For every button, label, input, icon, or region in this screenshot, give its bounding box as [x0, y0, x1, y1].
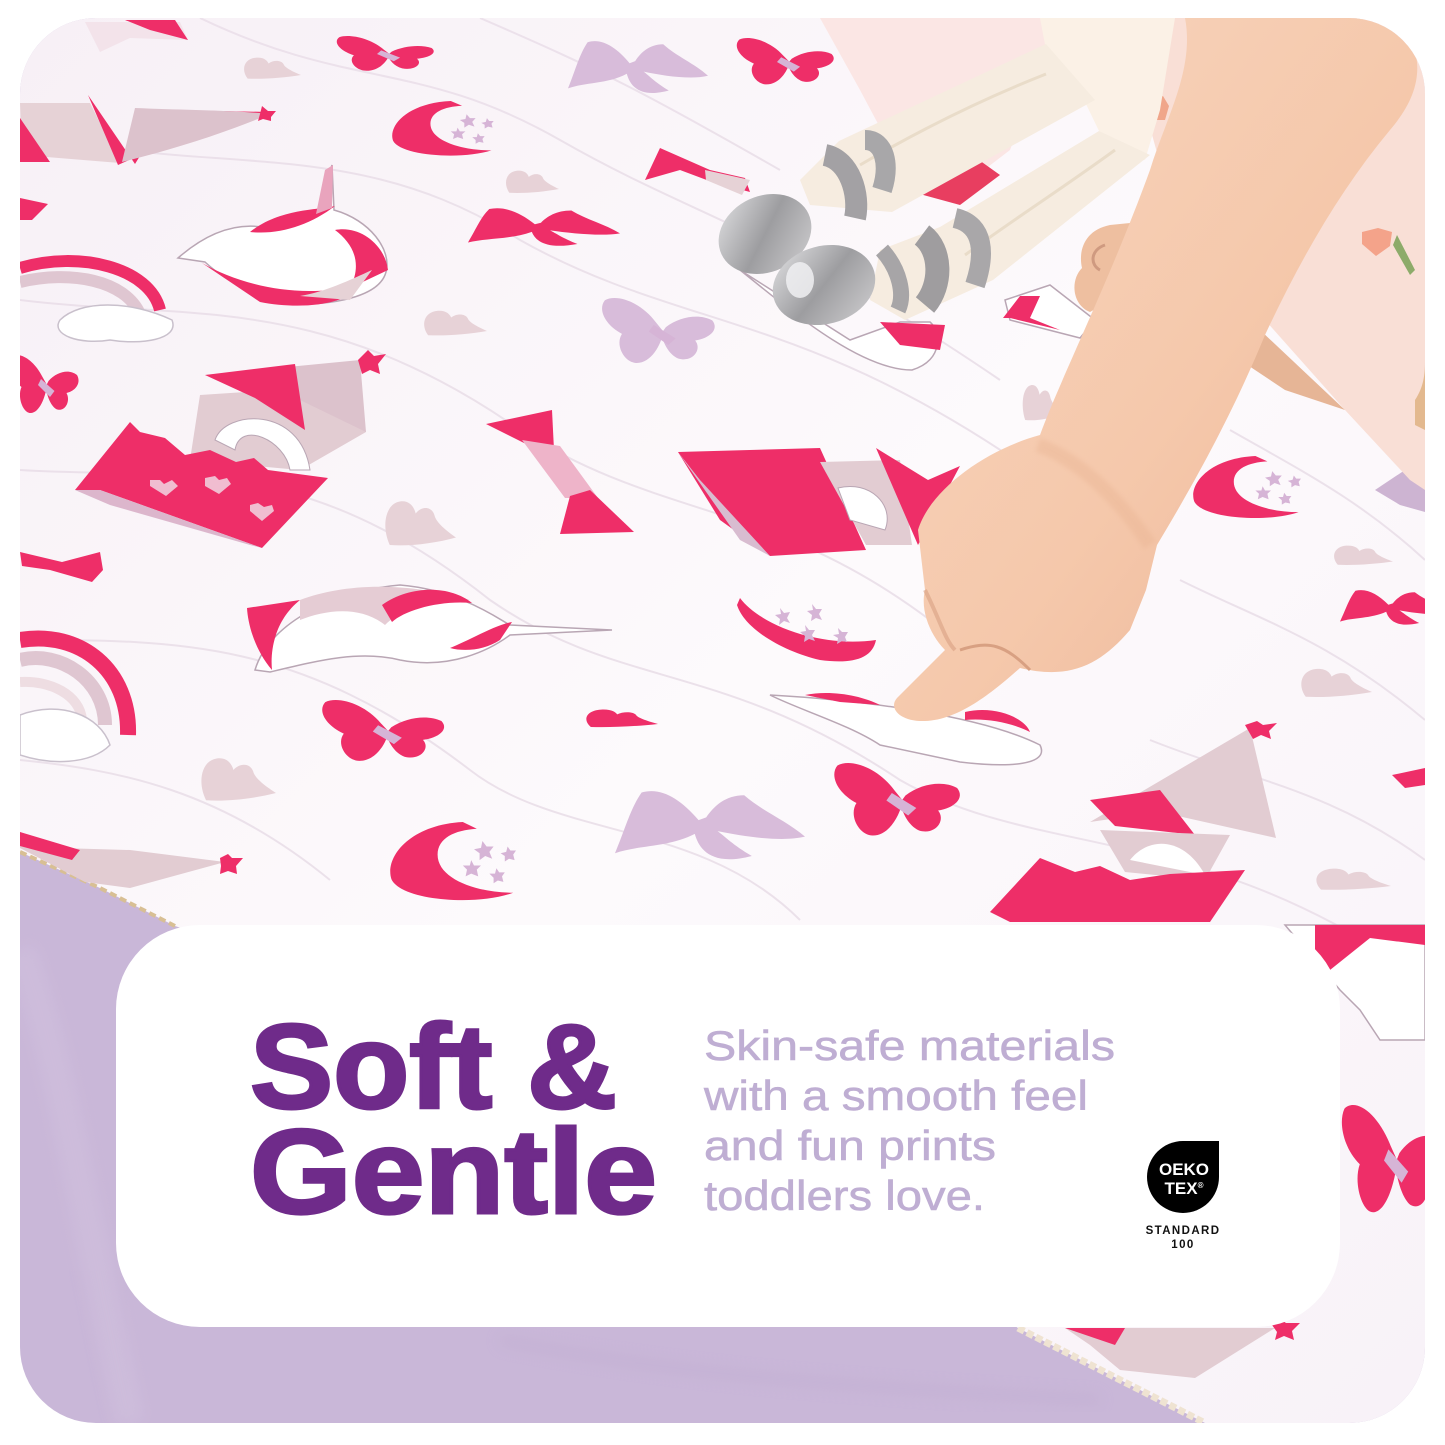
info card	[116, 925, 1340, 1327]
print: rainbow lower	[20, 638, 128, 762]
print: unicorn under finger	[770, 693, 1042, 765]
description text: toddlers love.	[704, 1172, 985, 1219]
OEKO-TEX certification badge	[1146, 1141, 1220, 1251]
print: lilac bow top	[568, 41, 708, 93]
print: pink butterfly lower	[322, 700, 444, 761]
print: pink butterfly right edge	[1342, 1105, 1443, 1212]
print: small pink heart	[586, 710, 658, 727]
doll leg lower	[870, 131, 1150, 320]
print: castle lower right	[990, 721, 1277, 922]
print: candy top	[645, 148, 750, 195]
heading: Soft &	[250, 1000, 617, 1134]
print: accent left edge	[20, 552, 103, 582]
print: lilac butterfly	[602, 298, 715, 363]
print: right edge accent	[1392, 768, 1425, 788]
print: left-edge top accent	[20, 198, 48, 220]
OEKO-TEX certification badge: STANDARD	[1146, 1225, 1220, 1237]
print: moon right	[1193, 456, 1301, 518]
pad stitched edge bottom	[1018, 1328, 1205, 1423]
print: castle right	[678, 448, 960, 556]
doll leg upper	[800, 44, 1095, 218]
print: castle center	[75, 350, 386, 548]
print: pink bow right edge	[1340, 590, 1425, 625]
print: pink butterfly left edge	[20, 355, 78, 413]
pad stitched edge	[20, 852, 175, 926]
print: moon top	[392, 101, 494, 156]
doll toe: silver highlight	[786, 262, 814, 298]
print: castle top left	[20, 95, 276, 165]
print: lilac shape right edge	[1375, 470, 1425, 512]
print: unicorn center	[247, 585, 612, 672]
print: top-left corner shape	[85, 22, 188, 52]
print: hearts	[201, 58, 1393, 890]
dress and child body	[1145, 18, 1425, 490]
doll body	[1040, 18, 1175, 160]
child's toes	[1074, 222, 1140, 312]
OEKO-TEX certification badge: ®	[1198, 1181, 1204, 1190]
doll dress red shadow	[905, 150, 1000, 205]
print: unicorn peeking near arm	[1003, 285, 1095, 338]
print: pink butterfly top left	[337, 36, 434, 71]
print: moon lower center	[737, 598, 876, 661]
print: top-left accent	[125, 20, 188, 40]
child's arm and hand	[894, 18, 1417, 721]
print: moon lower left	[390, 822, 516, 900]
print: candy center	[486, 410, 634, 534]
description text: Skin-safe materials	[704, 1022, 1115, 1069]
print: pink bow	[468, 208, 620, 246]
heading: Gentle	[250, 1105, 657, 1239]
print: lilac bow lower	[615, 791, 805, 859]
print: under doll feet shapes	[740, 270, 945, 370]
OEKO-TEX certification badge: 100	[1171, 1239, 1195, 1251]
print: hat lower left	[20, 832, 243, 888]
quilting stitch lines	[20, 18, 1425, 980]
OEKO-TEX certification badge: OEKO	[1159, 1160, 1209, 1179]
doll dress tulle	[820, 18, 1060, 200]
doll silver shoe upper	[705, 179, 825, 289]
print: pink butterfly top right	[737, 38, 834, 84]
OEKO-TEX certification badge: TEX	[1165, 1179, 1198, 1198]
print: rainbow upper	[20, 261, 173, 342]
doll silver shoe lower	[764, 234, 884, 336]
print: pink butterfly center lower	[834, 763, 960, 836]
print: unicorn right edge	[1285, 925, 1425, 1040]
print: hat bottom right	[1065, 1319, 1300, 1378]
description text: with a smooth feel	[703, 1072, 1088, 1119]
description text: and fun prints	[704, 1122, 996, 1169]
print: unicorn top	[178, 165, 388, 306]
